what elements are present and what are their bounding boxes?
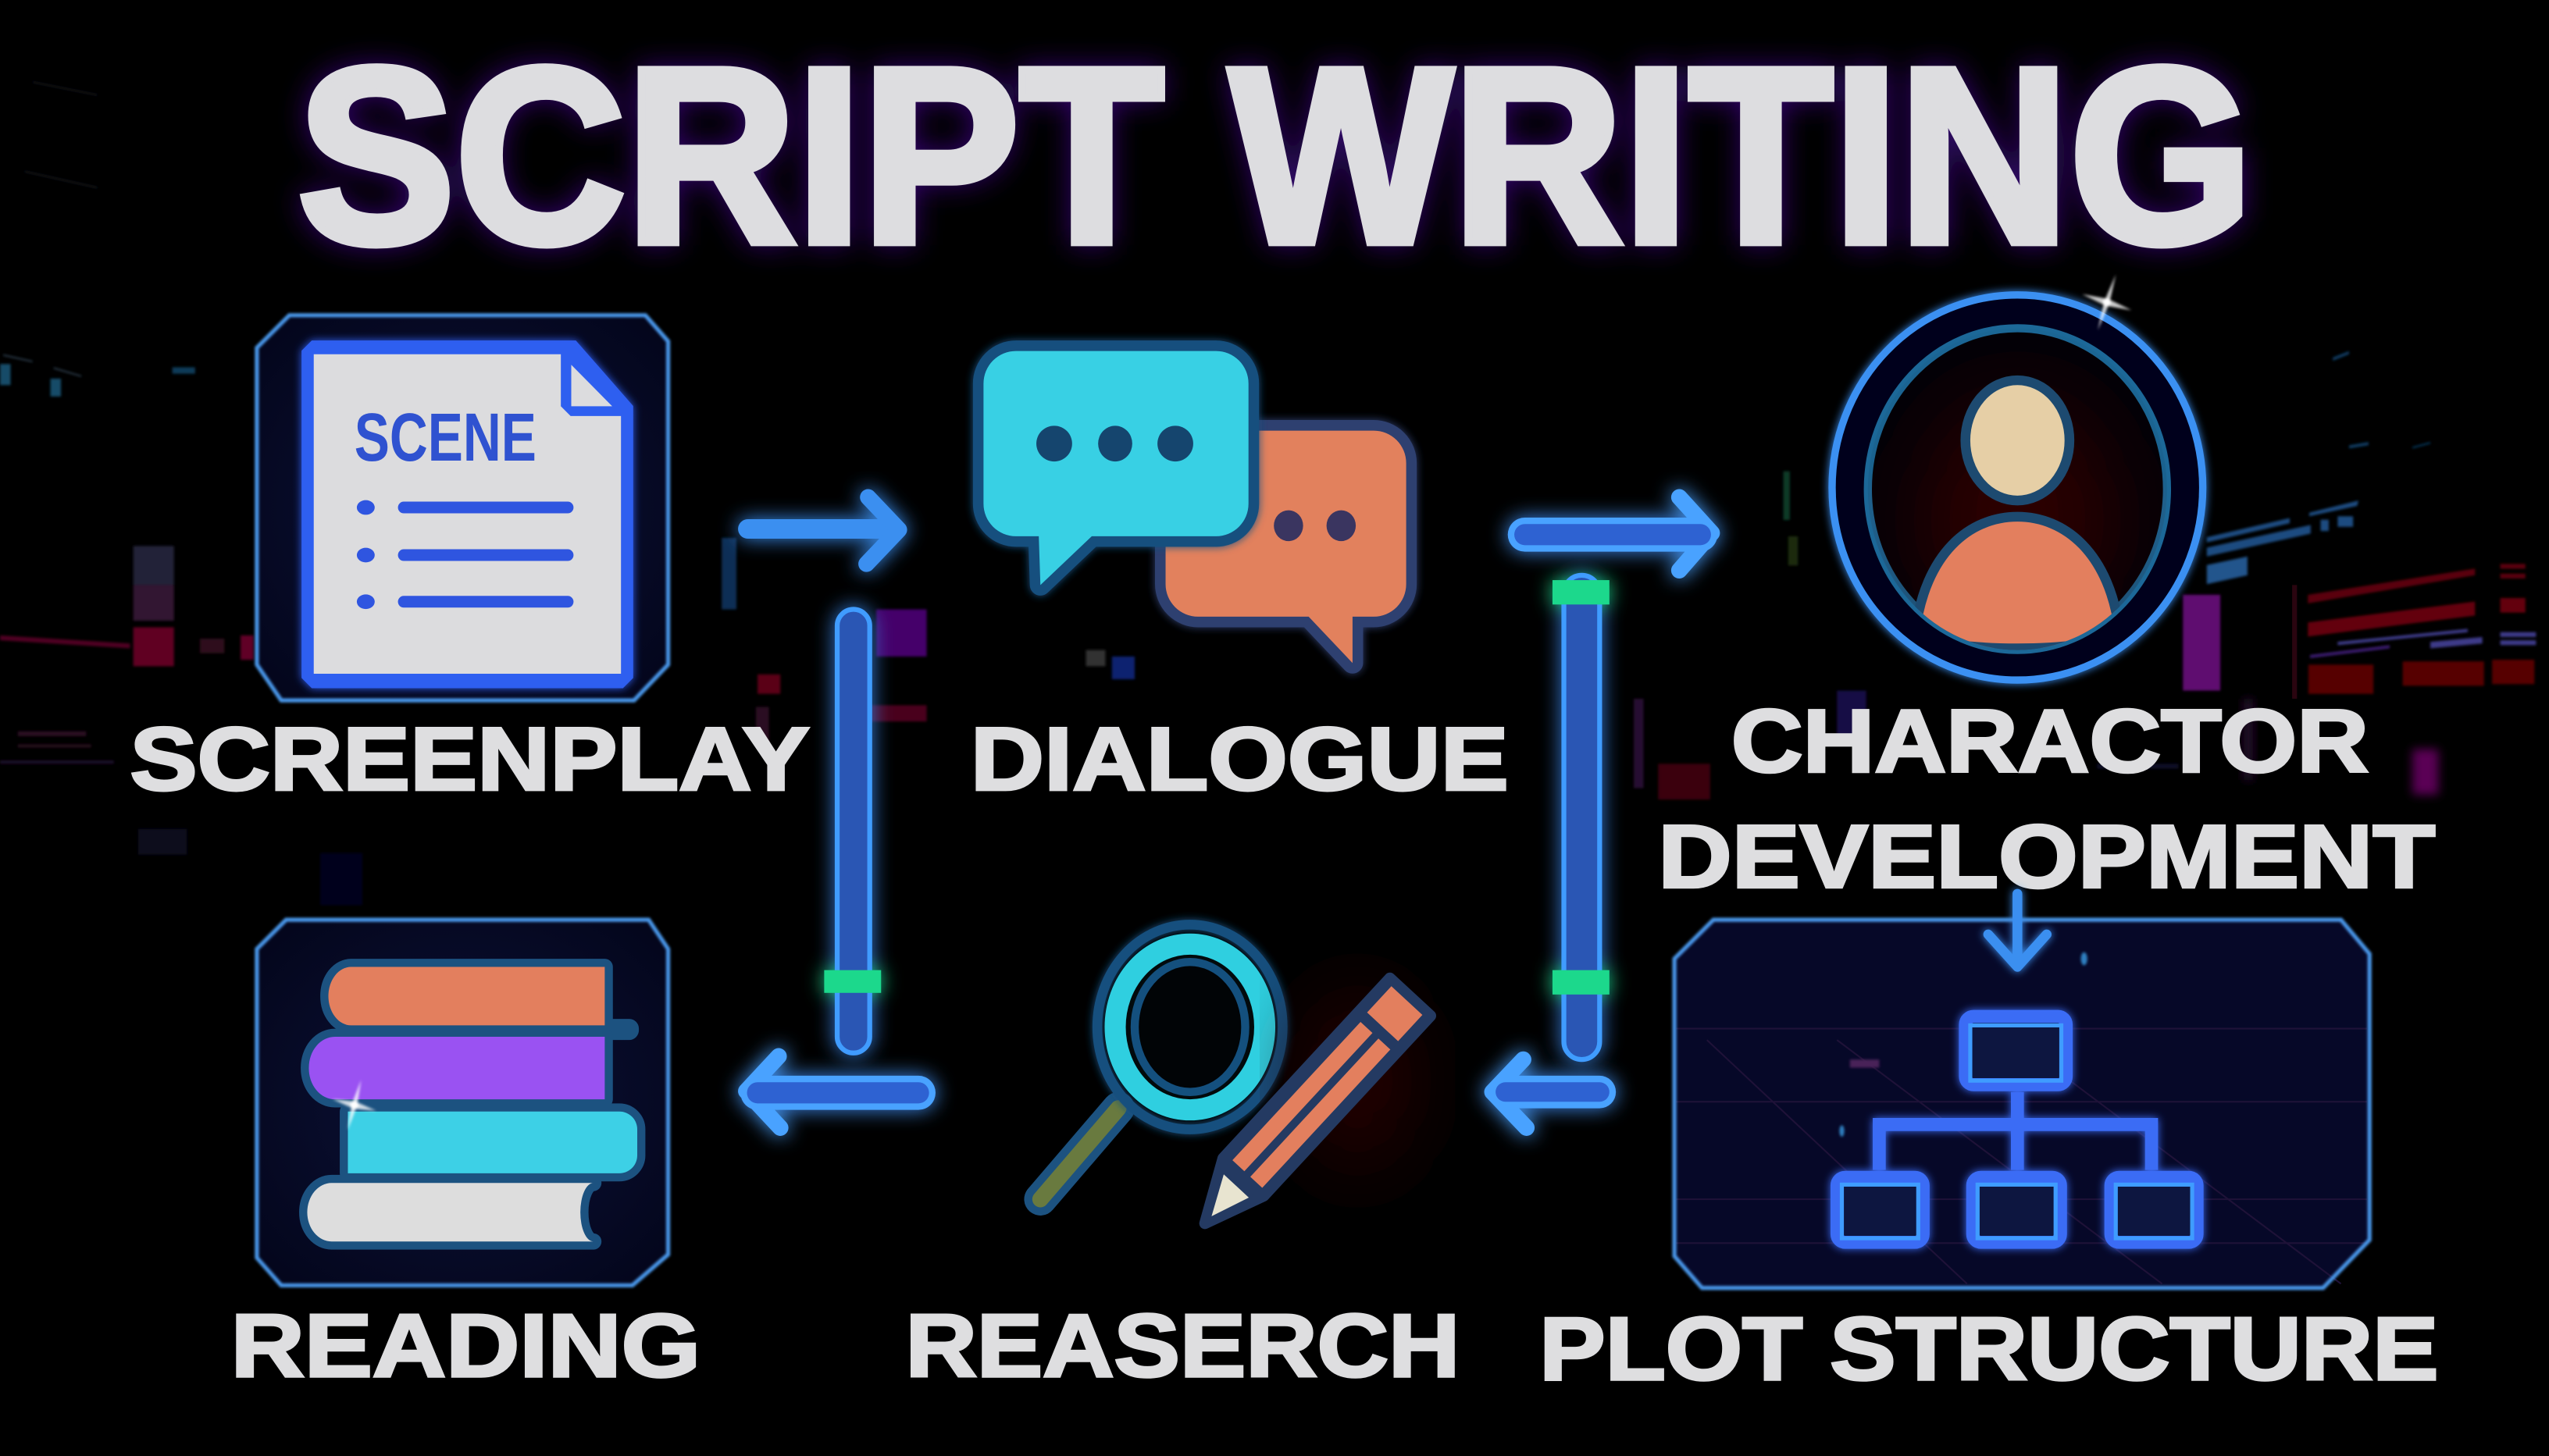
sparkle — [326, 1074, 383, 1136]
faint grid lines — [1676, 1029, 2367, 1283]
icon: script document — [302, 341, 633, 687]
faint panel sparks — [1839, 952, 2087, 1137]
title glow and heading: SCRIPT WRITING — [296, 16, 2255, 295]
label: reading: READING — [231, 1296, 701, 1396]
icon: magnifier and pencil — [1040, 924, 1431, 1240]
icon: speech bubbles — [983, 351, 1406, 663]
connector: left vertical bar — [824, 610, 881, 1053]
sparkle — [2073, 266, 2141, 338]
magnifier — [1040, 924, 1282, 1199]
background: dim cityscape data blocks — [0, 81, 2536, 905]
panel: screenplay — [257, 315, 668, 700]
head — [1966, 380, 2070, 500]
org chart highlights — [1841, 1025, 2192, 1238]
panel: plot structure — [1674, 920, 2369, 1288]
label: research: REASERCH — [905, 1296, 1460, 1396]
scene heading: SCENE — [355, 399, 537, 475]
icon: book stack — [307, 967, 639, 1241]
arrow: dialogue to character — [1525, 497, 1712, 571]
label: character development — [1658, 692, 2435, 906]
arrow: character down to plot — [1988, 894, 2047, 967]
label: screenplay: SCREENPLAY — [130, 710, 810, 810]
label: character development: CHARACTOR — [1731, 692, 2369, 792]
arrow: screenplay to dialogue — [748, 497, 899, 564]
pencil — [1309, 991, 1406, 1170]
typing dots — [1036, 425, 1193, 461]
body — [1915, 517, 2119, 649]
icon: character portrait — [1832, 266, 2203, 680]
title glow and heading: SCRIPT WRITING — [298, 16, 2253, 295]
panel: reading — [257, 920, 668, 1285]
icon: org chart — [1837, 1016, 2197, 1242]
connector: right vertical bar — [1553, 575, 1610, 1059]
bullet lines — [357, 500, 573, 609]
label: character development: DEVELOPMENT — [1658, 806, 2435, 906]
label: plot structure: PLOT STRUCTURE — [1539, 1299, 2438, 1399]
label: dialogue: DIALOGUE — [971, 710, 1509, 810]
arrow: to reading — [746, 1056, 918, 1128]
arrow: to research — [1492, 1059, 1599, 1128]
